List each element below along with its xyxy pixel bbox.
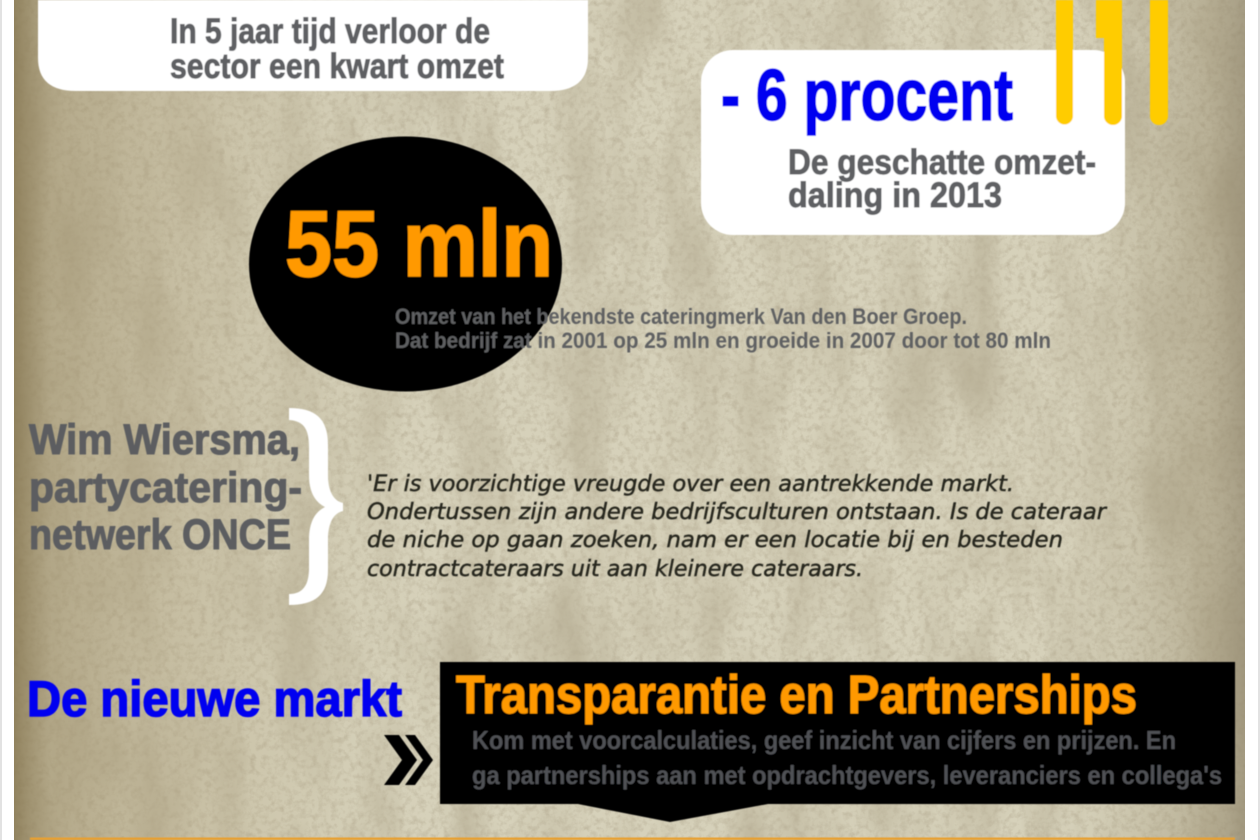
badge: 55 million: 55 mln <box>285 191 553 296</box>
text: estimated decline caption <box>788 143 1096 215</box>
text: estimated decline caption: De geschatte omzet- <box>788 143 1096 182</box>
heading: transparency and partnerships: Transparantie en Partnerships <box>456 665 1137 725</box>
text: sector revenue loss: sector een kwart omzet <box>170 47 504 86</box>
panel: estimated decline 2013 <box>701 50 1125 235</box>
text: sector revenue loss: In 5 jaar tijd verloor de <box>170 12 490 51</box>
text: speaker name: partycatering- <box>29 464 302 512</box>
text: transparency advice: Kom met voorcalculaties, geef inzicht van cijfers en prijzen. En <box>472 725 1176 755</box>
stat: minus 6 percent: - 6 procent <box>721 56 1013 136</box>
text: sector revenue loss <box>170 12 504 86</box>
panel: transparency and partnerships <box>440 662 1235 822</box>
panel: sector revenue loss <box>38 0 588 91</box>
text: transparency advice <box>472 725 1222 790</box>
text: quote <box>367 472 1108 582</box>
text: quote: contractcateraars uit aan kleinere cateraars. <box>367 557 863 582</box>
text: Van den Boer revenue note: Omzet van het bekendste cateringmerk Van den Boer Groep. <box>395 304 967 329</box>
next section top edge <box>30 838 1235 840</box>
icon: double chevron arrow <box>384 735 433 785</box>
text: quote: Ondertussen zijn andere bedrijfsculturen ontstaan. Is de cateraar <box>367 500 1108 525</box>
text: quote: de niche op gaan zoeken, nam er een locatie bij en besteden <box>367 528 1063 553</box>
text: Van den Boer revenue note <box>395 304 1051 353</box>
text: quote: 'Er is voorzichtige vreugde over een aantrekkende markt. <box>367 472 1014 497</box>
icon: white curly brace <box>289 408 343 605</box>
text: Van den Boer revenue note: Dat bedrijf zat in 2001 op 25 mln en groeide in 2007 door tot 80 mln <box>395 328 1051 353</box>
text: speaker name: Wim Wiersma, <box>29 416 300 464</box>
text: estimated decline caption: daling in 2013 <box>788 176 1002 215</box>
badge: 55 million <box>249 136 562 392</box>
text: speaker name: netwerk ONCE <box>29 511 291 559</box>
heading: the new market: De nieuwe markt <box>27 671 402 727</box>
text: speaker name <box>29 416 302 559</box>
icon: yellow fork tines <box>1056 0 1168 125</box>
